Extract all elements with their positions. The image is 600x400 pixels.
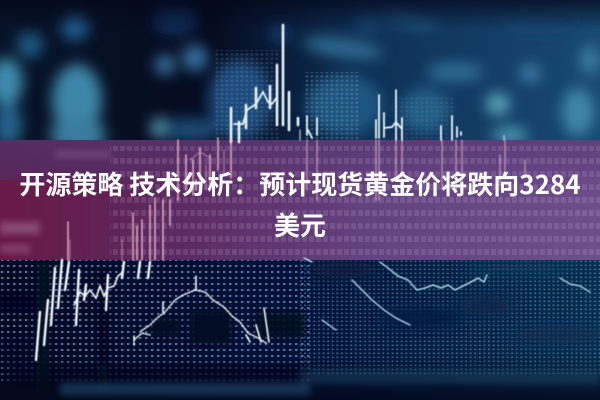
price chart: lines below the band	[36, 258, 590, 360]
title text: 开源策略 技术分析：预计现货黄金价将跌向3284	[19, 165, 581, 202]
title text	[19, 165, 581, 243]
title band	[0, 140, 600, 260]
title text: 美元	[274, 206, 326, 243]
price chart: lines through the band	[68, 138, 525, 260]
data grid behind the chart	[215, 50, 455, 140]
price chart: candlestick lines above the band	[231, 25, 504, 142]
